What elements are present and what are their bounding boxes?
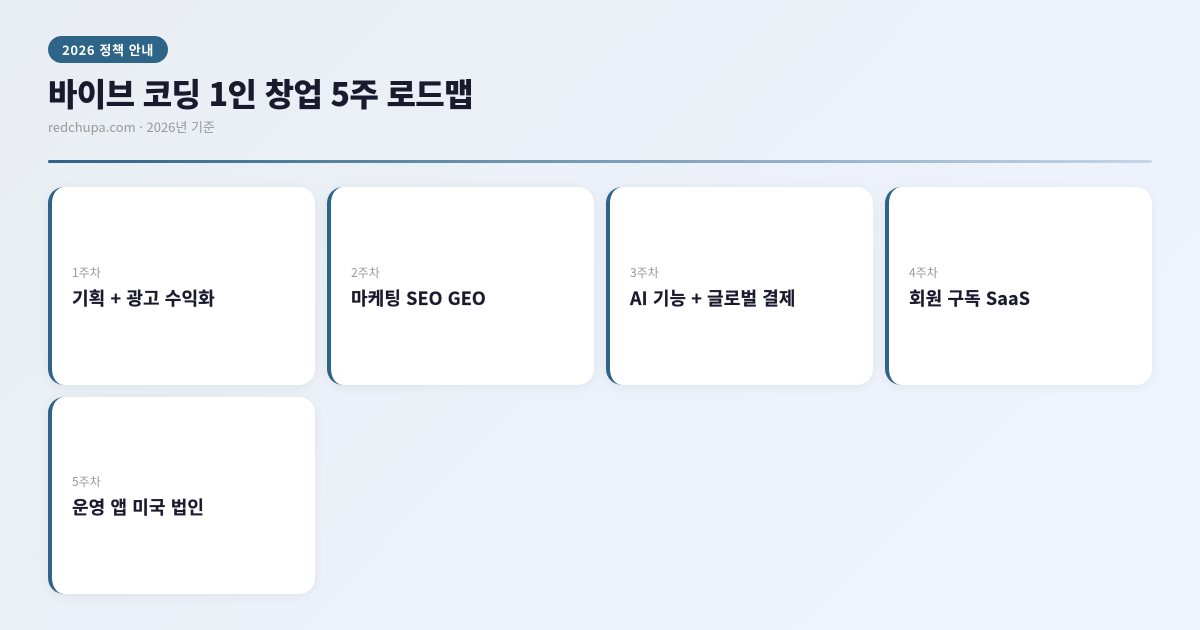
badge: 2026 정책 안내 [62,40,154,59]
badge [48,36,168,63]
panel: week 3 [606,187,873,385]
subtitle: redchupa.com · 2026년 기준 [48,117,215,136]
week label: 5주차 [72,473,101,490]
week label: 3주차 [630,264,659,281]
title: 바이브 코딩 1인 창업 5주 로드맵 [48,70,473,116]
panel: week 1 [48,187,315,385]
week title: AI 기능 + 글로벌 결제 [630,285,796,311]
panel: week 5 [48,397,315,594]
panel: week 4 [885,187,1152,385]
week label: 2주차 [351,264,380,281]
week title: 기획 + 광고 수익화 [72,285,215,311]
week title: 마케팅 SEO GEO [351,285,486,311]
panel: week 2 [327,187,594,385]
week title: 회원 구독 SaaS [909,285,1030,311]
week label: 1주차 [72,264,101,281]
week label: 4주차 [909,264,938,281]
week title: 운영 앱 미국 법인 [72,494,204,520]
